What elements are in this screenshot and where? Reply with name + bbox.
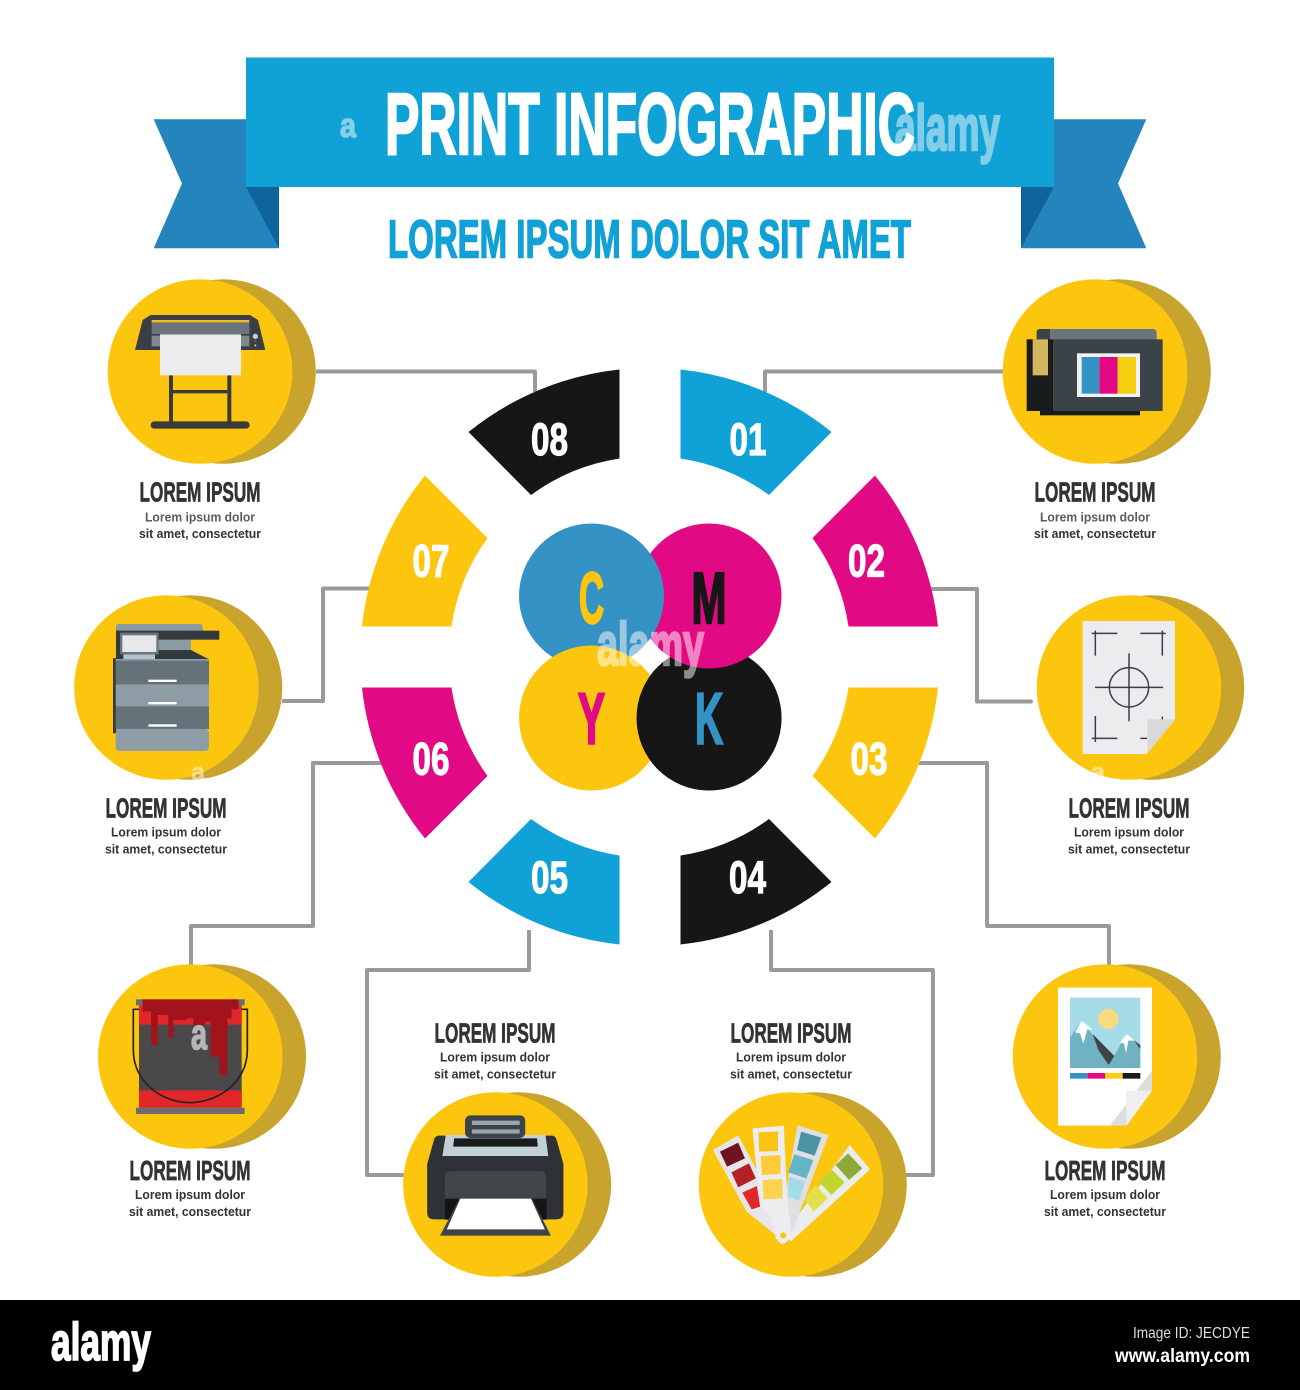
panel: printed photo	[1013, 964, 1221, 1219]
heading: LOREM IPSUM	[130, 1155, 250, 1186]
icon: ink cartridge	[1027, 329, 1163, 415]
panel: large format plotter	[108, 279, 316, 541]
watermark overlays: alamy	[597, 611, 704, 678]
segmented ring	[362, 370, 938, 944]
watermark overlays: a	[340, 107, 357, 145]
icon: copier	[113, 624, 219, 751]
segment 02: 02	[848, 536, 885, 586]
description: Lorem ipsum dolor	[1040, 510, 1150, 524]
heading: LOREM IPSUM	[140, 476, 260, 508]
icon: paint bucket	[133, 999, 247, 1114]
description: sit amet, consectetur	[1068, 842, 1190, 856]
panel: paint bucket	[98, 964, 306, 1219]
letter Y: Y	[578, 680, 605, 760]
segment 06: 06	[412, 734, 450, 784]
icon: plotter	[135, 315, 265, 429]
description: Lorem ipsum dolor	[736, 1050, 846, 1064]
subtitle: LOREM IPSUM DOLOR SIT AMET	[388, 210, 911, 270]
description	[139, 510, 261, 541]
icon: registration mark sheet	[1083, 621, 1175, 754]
icon: printer	[427, 1115, 563, 1236]
segment 01: 01	[730, 414, 766, 465]
description: sit amet, consectetur	[1034, 526, 1156, 541]
panel: ink cartridge	[1003, 279, 1211, 541]
description: sit amet, consectetur	[105, 842, 227, 856]
description	[129, 1187, 251, 1219]
description: Lorem ipsum dolor	[135, 1187, 245, 1202]
heading: LOREM IPSUM	[1044, 1155, 1166, 1186]
description: sit amet, consectetur	[1044, 1204, 1166, 1219]
description: Lorem ipsum dolor	[111, 824, 221, 840]
watermark overlays: alamy	[895, 92, 1000, 164]
title ribbon banner	[154, 58, 1146, 248]
image id: Image ID: JECDYE	[1133, 1325, 1250, 1342]
segment 04	[680, 819, 832, 944]
CMYK circles: C	[579, 559, 604, 639]
description	[434, 1050, 556, 1082]
heading: LOREM IPSUM	[1068, 792, 1190, 824]
heading: LOREM IPSUM	[730, 1018, 852, 1048]
description: Lorem ipsum dolor	[440, 1050, 550, 1064]
watermark overlays	[191, 92, 1106, 1059]
segment 07	[362, 476, 488, 626]
icon: colour swatch fan	[713, 1125, 870, 1244]
letter K: K	[695, 680, 723, 760]
heading: LOREM IPSUM	[106, 792, 226, 824]
watermark overlays: a	[191, 1010, 207, 1059]
description	[1034, 510, 1156, 541]
description	[105, 824, 227, 856]
description: sit amet, consectetur	[730, 1066, 852, 1082]
heading: LOREM IPSUM	[1034, 476, 1156, 508]
description: Lorem ipsum dolor	[1074, 824, 1184, 840]
footer url: www.alamy.com	[1114, 1346, 1250, 1367]
description: sit amet, consectetur	[434, 1066, 556, 1082]
segment 08	[468, 370, 620, 495]
description: Lorem ipsum dolor	[145, 510, 255, 524]
segment 01	[680, 370, 832, 495]
connector lines	[191, 372, 1109, 1175]
CMYK circles	[519, 524, 782, 790]
description: sit amet, consectetur	[129, 1204, 251, 1219]
description	[1068, 824, 1190, 856]
icon: photo print	[1058, 988, 1152, 1126]
segment 03: 03	[850, 734, 888, 784]
description	[1044, 1187, 1166, 1219]
segment 05	[468, 819, 620, 944]
watermark overlays: a	[191, 759, 206, 786]
segment 04: 04	[729, 852, 766, 903]
watermark overlays: a	[1091, 759, 1106, 786]
segment 02	[812, 476, 938, 626]
heading: LOREM IPSUM	[434, 1018, 556, 1048]
footer bar	[0, 1300, 1300, 1390]
segment 07: 07	[412, 536, 450, 586]
title: PRINT INFOGRAPHIC	[385, 76, 915, 173]
description: sit amet, consectetur	[139, 526, 261, 541]
segment 06	[362, 688, 488, 838]
panel: registration target	[1037, 595, 1244, 856]
footer logo: alamy	[51, 1313, 151, 1372]
segment 03	[812, 688, 938, 838]
panel: office printer	[403, 1018, 611, 1277]
description	[730, 1050, 852, 1082]
segment 05: 05	[531, 852, 568, 903]
description: Lorem ipsum dolor	[1050, 1187, 1160, 1202]
panel: colour swatches	[699, 1018, 907, 1277]
letter M: M	[692, 559, 726, 639]
segment 08: 08	[531, 414, 568, 465]
panel: copier	[74, 595, 282, 856]
